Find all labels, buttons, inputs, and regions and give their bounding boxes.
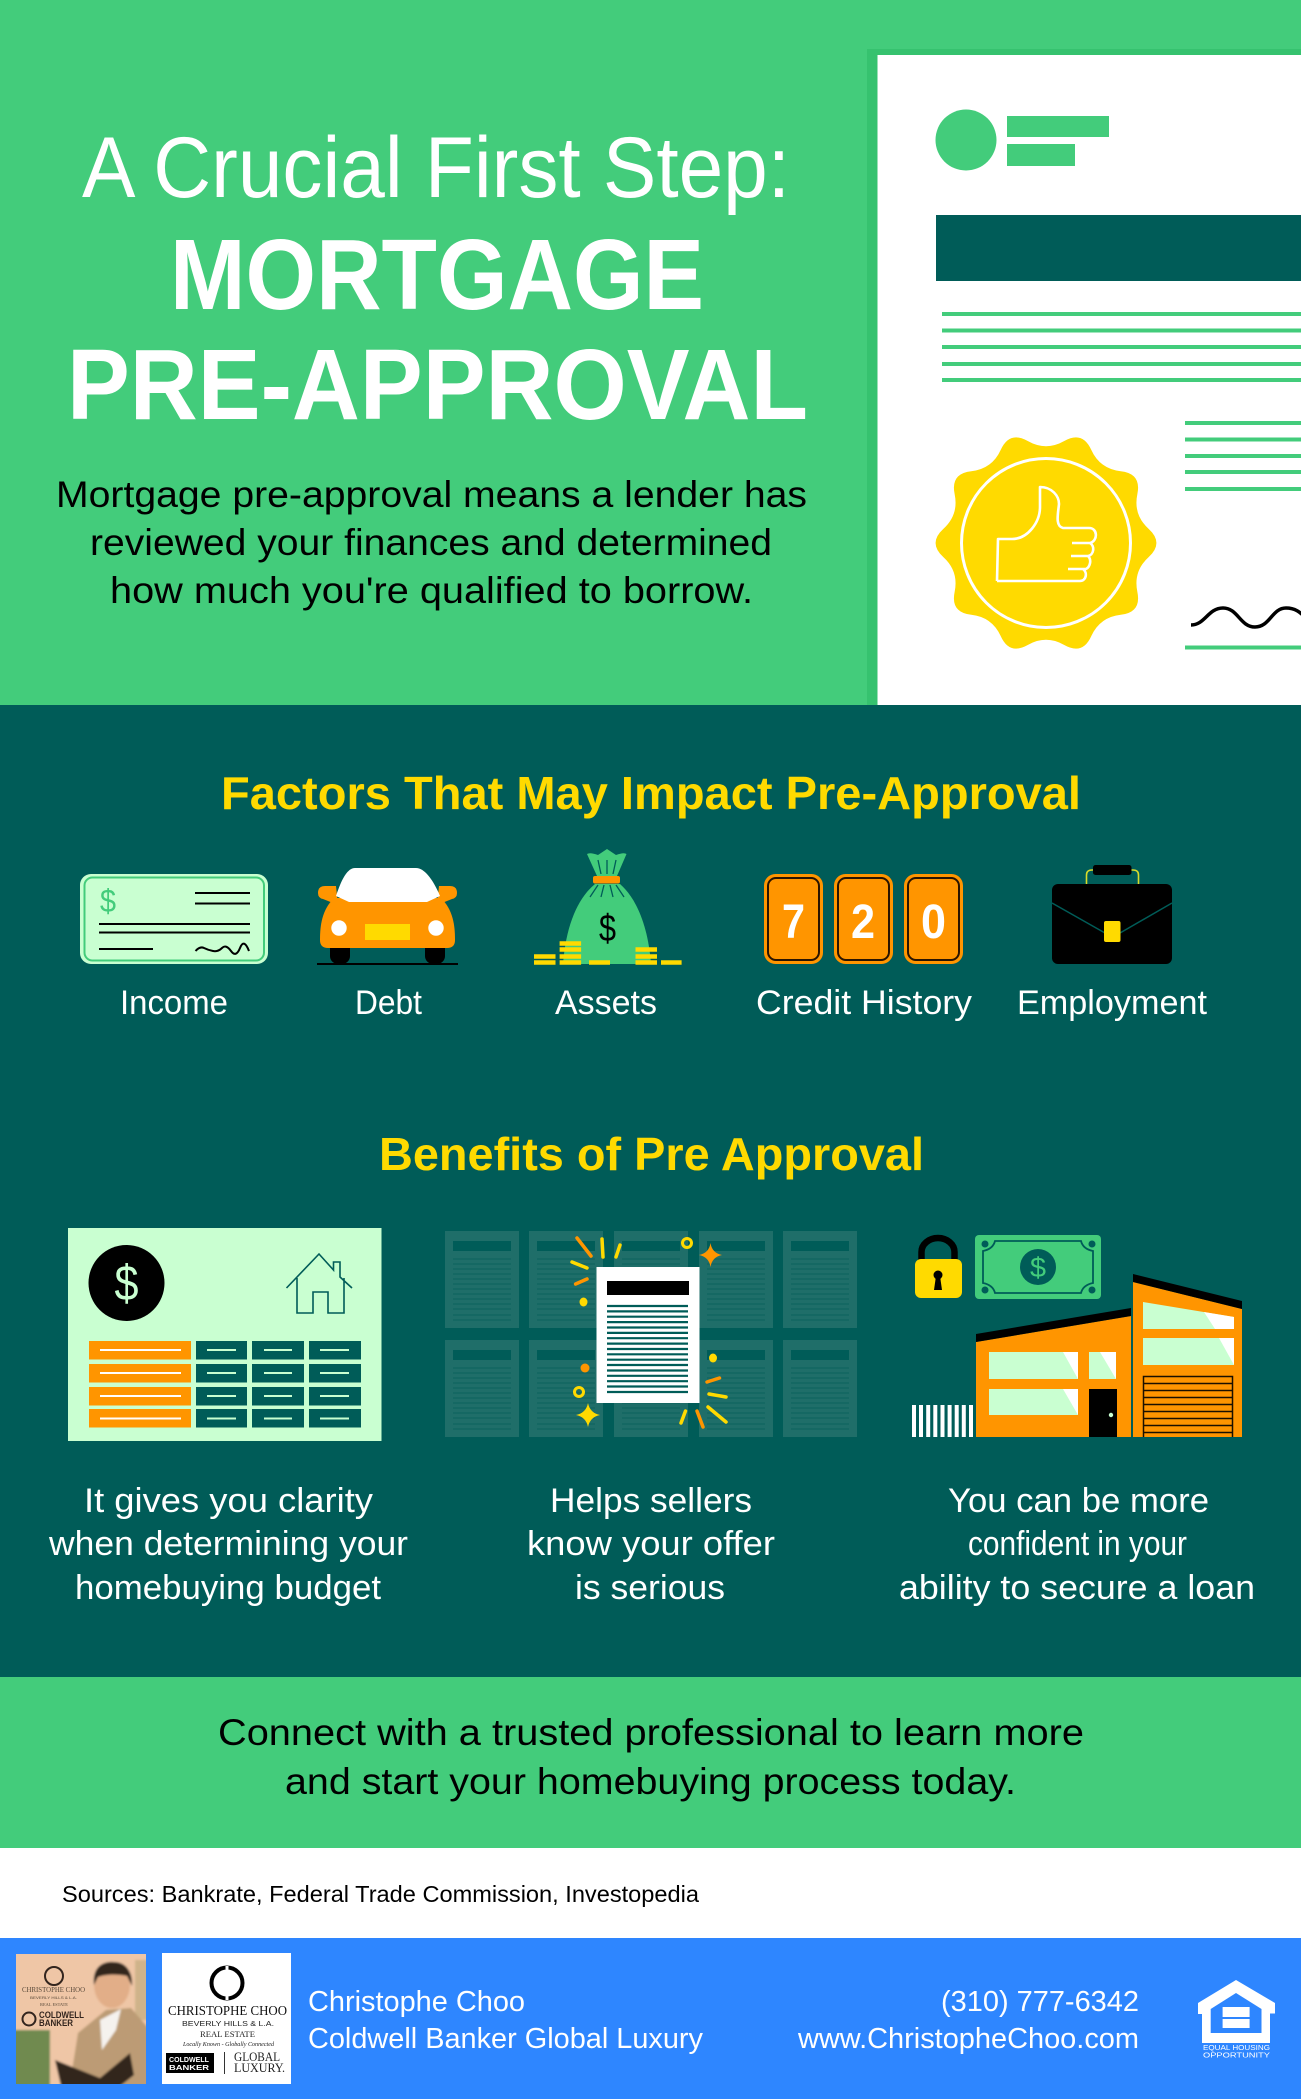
brokerage logo: GLOBAL xyxy=(234,2049,280,2064)
brokerage logo xyxy=(162,1953,291,2084)
brokerage logo: BANKER xyxy=(169,2063,210,2072)
icon: equal housing opportunity: EQUAL HOUSING xyxy=(1203,2043,1270,2052)
benefit text: serious offer xyxy=(527,1482,775,1607)
icon: cheque: $ xyxy=(100,883,116,919)
icon: money bag and coins xyxy=(534,849,682,964)
brokerage logo: Locally Known - Globally Connected xyxy=(182,2041,275,2048)
agent name and company: Coldwell Banker Global Luxury xyxy=(308,2023,703,2055)
icon: 720 score tiles xyxy=(764,874,962,964)
benefit text: serious offer: know your offer xyxy=(527,1525,775,1563)
benefit text: serious offer: Helps sellers xyxy=(550,1482,752,1520)
title line: Pre-Approval: PRE-APPROVAL xyxy=(67,329,808,441)
illustration: highlighted document xyxy=(445,1231,857,1437)
icon: briefcase xyxy=(1052,865,1172,964)
title line: Mortgage: MORTGAGE xyxy=(170,219,704,331)
brokerage logo: BEVERLY HILLS & L.A. xyxy=(182,2019,274,2028)
intro paragraph: Mortgage pre-approval means a lender has xyxy=(56,474,807,515)
agent name and company xyxy=(308,1986,703,2055)
panel: footer xyxy=(0,1938,1301,2099)
icon: 720 score tiles: 2 xyxy=(851,896,875,949)
icon: car xyxy=(317,868,458,965)
panel: call to action: and start your homebuying process today. xyxy=(285,1761,1016,1802)
agent photo: REAL ESTATE xyxy=(40,2002,69,2007)
contact details xyxy=(797,1986,1139,2055)
benefit text: clarity: homebuying budget xyxy=(75,1569,382,1607)
benefit: clarity xyxy=(48,1228,408,1607)
icon: equal housing opportunity xyxy=(1198,1980,1275,2060)
illustration: lock, cash and house xyxy=(914,1235,1242,1437)
benefit text: clarity: when determining your xyxy=(48,1525,408,1563)
agent photo: BANKER xyxy=(39,2018,73,2028)
factor: credit history: Credit History xyxy=(756,984,972,1022)
brokerage logo: REAL ESTATE xyxy=(200,2030,255,2039)
factor: debt xyxy=(317,868,458,1022)
brokerage logo: LUXURY. xyxy=(234,2060,285,2075)
icon: padlock xyxy=(915,1238,962,1298)
factor: income xyxy=(80,874,268,1022)
icon: dollar bill xyxy=(975,1235,1101,1299)
benefit text: confidence: ability to secure a loan xyxy=(899,1569,1255,1607)
benefit: serious offer xyxy=(445,1231,857,1607)
factor: employment xyxy=(1017,865,1208,1022)
icon: thumbs-up seal xyxy=(936,437,1156,649)
agent name and company: Christophe Choo xyxy=(308,1986,525,2018)
panel: call to action: Connect with a trusted professional to learn more xyxy=(218,1712,1084,1753)
heading: benefits: Benefits of Pre Approval xyxy=(379,1128,924,1180)
factor: credit history xyxy=(756,874,972,1022)
benefit: confidence xyxy=(899,1235,1255,1607)
icon: cheque xyxy=(80,874,268,964)
icon: 720 score tiles: 0 xyxy=(921,896,946,949)
panel: header xyxy=(0,0,1301,705)
icon: equal housing opportunity: OPPORTUNITY xyxy=(1203,2050,1270,2060)
icon: money bag and coins: $ xyxy=(599,908,616,950)
intro paragraph: how much you're qualified to borrow. xyxy=(110,570,753,611)
benefit text: confidence: You can be more xyxy=(948,1482,1209,1520)
brokerage logo: CHRISTOPHE CHOO xyxy=(168,2004,287,2019)
agent photo: CHRISTOPHE CHOO xyxy=(22,1986,85,1994)
icon: 720 score tiles: 7 xyxy=(782,896,805,949)
brokerage logo: COLDWELL xyxy=(169,2055,209,2064)
panel: call to action xyxy=(0,1677,1301,1848)
agent photo: COLDWELL xyxy=(39,2010,84,2020)
title line: A Crucial First Step: A Crucial First Step: xyxy=(82,120,790,216)
intro paragraph: reviewed your finances and determined xyxy=(90,522,772,563)
factor: assets: Assets xyxy=(555,984,657,1022)
icon: dollar bill: $ xyxy=(1030,1252,1046,1283)
benefit text: confidence xyxy=(899,1482,1255,1607)
illustration: budget table: $ xyxy=(114,1255,138,1311)
benefit text: serious offer: is serious xyxy=(575,1569,725,1607)
heading: factors: Factors That May Impact Pre-Approval xyxy=(221,767,1081,819)
panel: factors and benefits xyxy=(0,705,1301,1677)
agent photo: BEVERLY HILLS & L.A. xyxy=(30,1995,77,2000)
factor: income: Income xyxy=(120,984,228,1022)
intro paragraph xyxy=(56,474,807,611)
factor: employment: Employment xyxy=(1017,984,1208,1022)
contact details: (310) 777-6342 xyxy=(941,1986,1139,2018)
benefit text: clarity xyxy=(48,1482,408,1607)
icon: modern house xyxy=(914,1274,1242,1437)
sources line: Sources: Bankrate, Federal Trade Commission, Investopedia xyxy=(62,1881,699,1907)
benefit text: clarity: It gives you clarity xyxy=(84,1482,373,1520)
contact details: www.ChristopheChoo.com xyxy=(797,2023,1139,2055)
agent photo xyxy=(16,1954,146,2084)
benefit text: confidence: confident in your xyxy=(968,1525,1187,1563)
factor: assets xyxy=(534,849,682,1022)
illustration: budget table xyxy=(68,1228,382,1441)
factor: debt: Debt xyxy=(355,984,423,1022)
illustration: pre-approval document xyxy=(867,49,1301,705)
